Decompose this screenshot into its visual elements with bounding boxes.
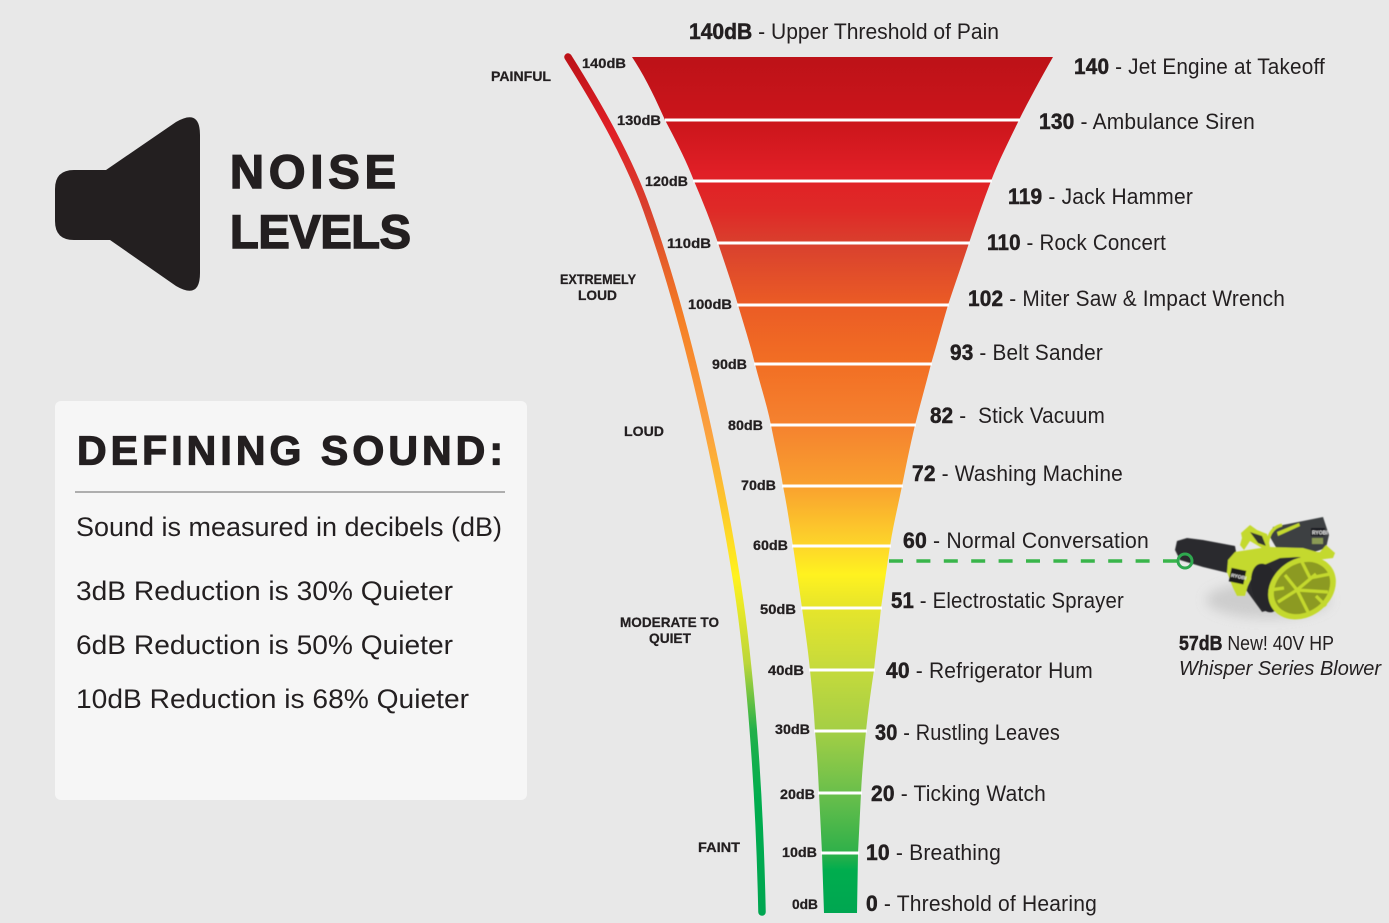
blower caption: Whisper Series Blower (1179, 658, 1382, 680)
noise source labels: 60 - Normal Conversation (903, 528, 1149, 553)
noise source labels: 40 - Refrigerator Hum (886, 658, 1093, 683)
title (230, 145, 411, 258)
title: NOISE (230, 145, 396, 198)
noise source labels: 82 - Stick Vacuum (930, 403, 1105, 428)
blower logo (1229, 568, 1248, 585)
noise source labels: 20 - Ticking Watch (871, 781, 1046, 806)
noise source labels: 30 - Rustling Leaves (875, 720, 1060, 745)
panel text: 10dB: 10dB Reduction is 68% Quieter (76, 684, 469, 714)
category labels: FAINT (698, 839, 740, 855)
category labels: PAINFUL (491, 68, 551, 84)
blower fan housing (1246, 560, 1286, 616)
blower dark core (1246, 556, 1315, 612)
noise source labels (866, 54, 1326, 916)
noise source labels: 102 - Miter Saw & Impact Wrench (968, 286, 1285, 311)
decibel scale labels: 30dB (775, 721, 810, 737)
decibel scale labels: 50dB (760, 601, 796, 617)
funnel chart (632, 57, 1053, 913)
decibel scale labels: 70dB (741, 477, 776, 493)
category labels (491, 68, 740, 855)
decibel scale labels: 80dB (728, 417, 763, 433)
decibel scale labels: 140dB (582, 55, 626, 71)
decibel scale labels: 40dB (768, 662, 804, 678)
noise source labels: 119 - Jack Hammer (1008, 184, 1193, 209)
title: LEVELS (230, 205, 411, 258)
category labels: QUIET (649, 630, 691, 646)
top heading: threshold of pain: 140dB - Upper Threshold of Pain (689, 19, 999, 44)
dashed connector (889, 554, 1192, 568)
category labels: MODERATE TO (620, 614, 719, 630)
decibel scale labels: 120dB (645, 173, 688, 189)
category labels: LOUD (578, 287, 617, 303)
panel text: 3dB: 3dB Reduction is 30% Quieter (76, 576, 453, 606)
decibel scale labels: 90dB (712, 356, 747, 372)
category labels: LOUD (624, 423, 664, 439)
curved scale bar (568, 57, 762, 912)
panel text: decibels: Sound is measured in decibels (dB) (76, 512, 502, 542)
noise source labels: 93 - Belt Sander (950, 340, 1103, 365)
panel text: 6dB: 6dB Reduction is 50% Quieter (76, 630, 453, 660)
noise source labels: 140 - Jet Engine at Takeoff (1074, 54, 1326, 79)
blower handle (1240, 525, 1270, 550)
category labels: EXTREMELY (560, 271, 637, 287)
decibel scale labels (582, 55, 818, 912)
decibel scale labels: 10dB (782, 844, 817, 860)
decibel scale labels: 0dB (792, 896, 818, 912)
blower nozzle (1175, 538, 1240, 575)
panel: defining sound (55, 401, 527, 800)
decibel scale labels: 60dB (753, 537, 788, 553)
noise source labels: 130 - Ambulance Siren (1039, 109, 1255, 134)
blower caption (1179, 633, 1382, 680)
noise source labels: 10 - Breathing (866, 840, 1001, 865)
blower battery (1270, 517, 1329, 552)
icon: speaker (55, 117, 200, 291)
icon: leaf blower (1175, 517, 1348, 632)
blower logo: RYOBI (1230, 573, 1247, 582)
decibel scale labels: 20dB (780, 786, 815, 802)
decibel scale labels: 100dB (688, 296, 732, 312)
decibel scale labels: 110dB (667, 235, 711, 251)
noise source labels: 110 - Rock Concert (987, 230, 1166, 255)
blower caption: 57dB New! 40V HP (1179, 633, 1334, 655)
noise source labels: 0 - Threshold of Hearing (866, 891, 1097, 916)
blower upper housing (1227, 547, 1335, 596)
noise source labels: 72 - Washing Machine (912, 461, 1123, 486)
panel heading: DEFINING SOUND: (77, 428, 503, 474)
noise source labels: 51 - Electrostatic Sprayer (891, 588, 1124, 613)
icon: leaf blower: RYOBI (1312, 530, 1328, 536)
decibel scale labels: 130dB (617, 112, 661, 128)
